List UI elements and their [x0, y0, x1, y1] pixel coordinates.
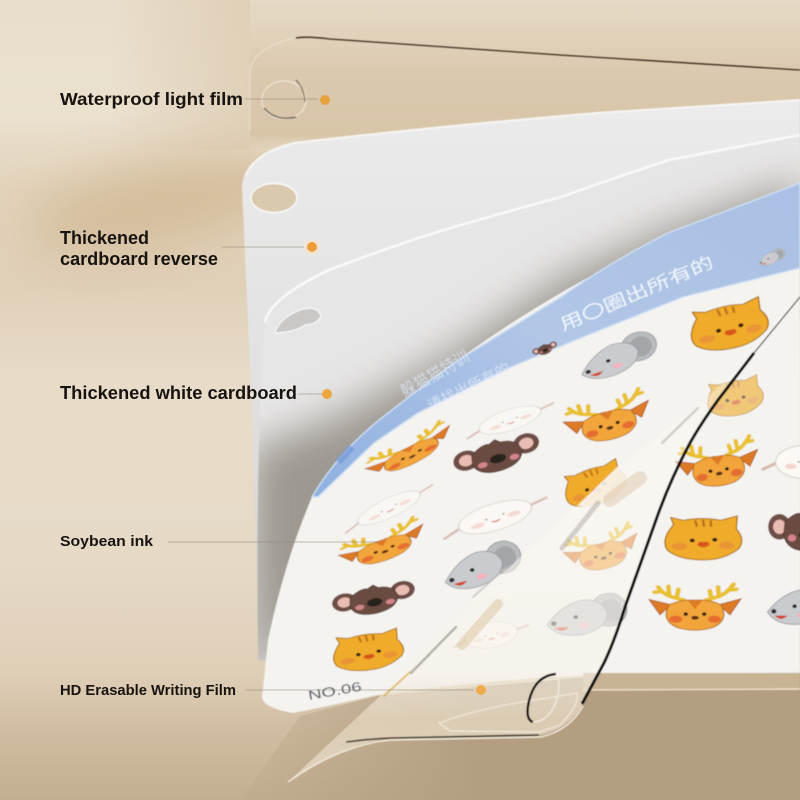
film inner curve	[439, 693, 577, 732]
label: thickened cardboard reverse: cardboard reverse	[60, 249, 218, 269]
white cardboard hole	[275, 308, 321, 333]
reverse sheet hole	[251, 184, 297, 212]
label: soybean ink: Soybean ink	[60, 533, 154, 550]
film bottom edge	[346, 735, 539, 742]
marker dots	[304, 95, 486, 695]
label: thickened cardboard reverse	[60, 228, 218, 269]
card number: NO.06	[307, 679, 363, 703]
band small icons	[338, 247, 787, 462]
animal stickers	[330, 296, 800, 675]
label: thickened cardboard reverse: Thickened	[60, 228, 149, 248]
label: thickened white cardboard: Thickened white cardboard	[60, 383, 297, 403]
card heading text	[398, 253, 716, 413]
puzzle card	[262, 183, 800, 713]
film black edge	[582, 297, 800, 704]
table surface	[583, 673, 800, 800]
card blue header band	[312, 183, 800, 497]
card white page	[262, 183, 800, 713]
film punched ring	[528, 674, 559, 722]
film punched hole	[262, 80, 306, 119]
card heading text: 躲猫猫特训	[398, 347, 473, 401]
label: waterproof light film: Waterproof light film	[60, 89, 243, 109]
thickened cardboard reverse sheet	[242, 100, 800, 660]
thickened white cardboard sheet	[250, 135, 800, 700]
film smears	[384, 408, 698, 696]
label: HD erasable writing film: HD Erasable Writing Film	[60, 683, 236, 699]
waterproof light film sheet	[250, 37, 800, 130]
card heading text: 用〇圈出所有的	[557, 253, 716, 335]
leader lines	[168, 99, 474, 690]
erasable writing film	[288, 297, 800, 782]
card heading text: 请找出所有的	[425, 360, 512, 413]
